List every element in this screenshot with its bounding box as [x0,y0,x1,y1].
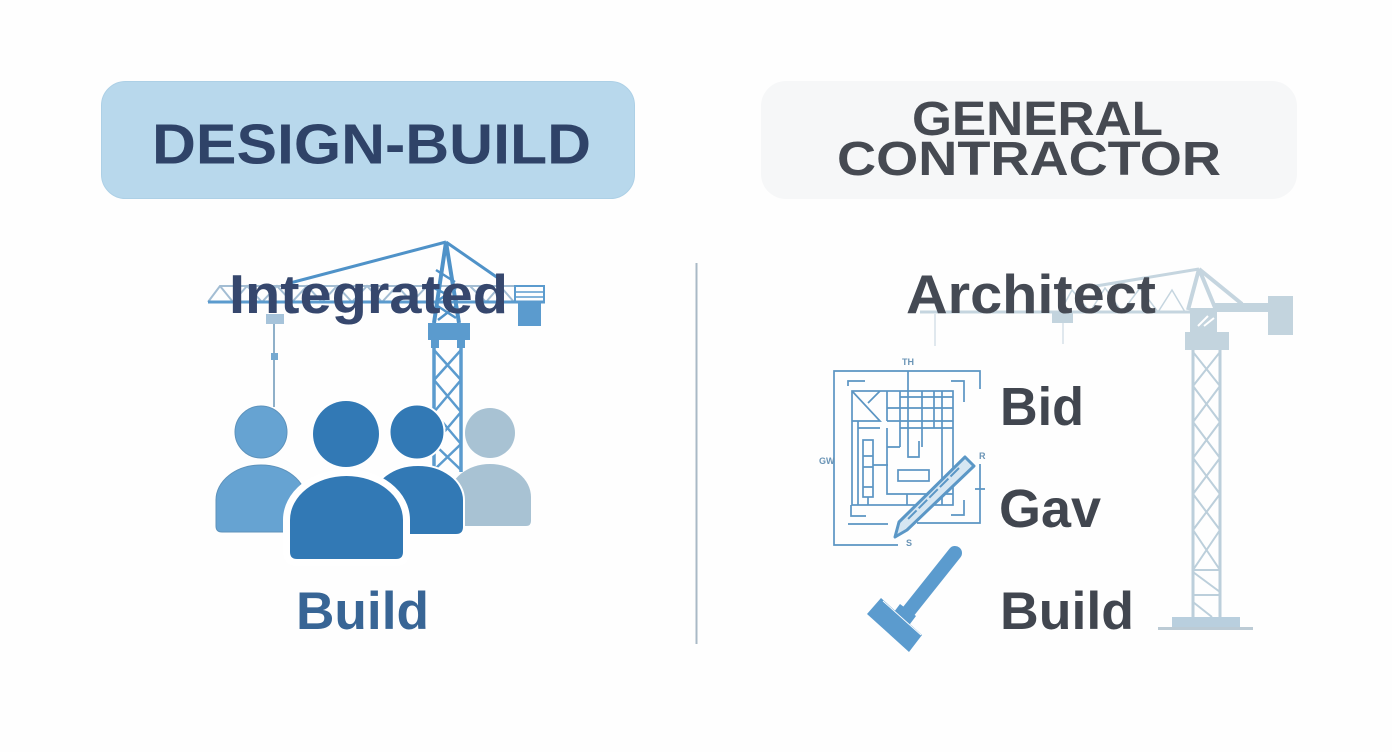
icon: blueprint floor plan: GW [819,456,835,466]
text: integrated: Integrated [229,263,508,325]
icon: blueprint floor plan: R [979,451,986,461]
heading pill: general contractor: CONTRACTOR [837,133,1221,186]
person: dark blue front centre [290,401,403,559]
person: light blue left [216,406,306,532]
icon: blueprint floor plan [819,357,986,548]
heading pill: design-build: DESIGN-BUILD [152,112,591,176]
text: gav: Gav [999,479,1101,539]
person: mid blue right [372,404,464,535]
divider [696,263,698,644]
heading pill: general contractor: GENERAL [912,93,1163,146]
heading pill: general contractor [761,81,1297,199]
text: architect: Architect [906,263,1156,325]
icon: pale tower crane [920,269,1293,630]
heading pill: design-build [102,82,634,198]
panel: design-build column [102,82,634,641]
icon: gavel hammer [867,553,955,652]
text: bid: Bid [1000,377,1084,437]
icon: blueprint floor plan: TH [902,357,914,367]
icon: pencil [895,457,974,537]
icon: blue tower crane [208,242,545,472]
person: pale back right [449,408,531,526]
icon: team of four people [216,401,531,559]
panel: general contractor column [761,81,1297,652]
text: build (general contractor): Build [1000,582,1134,641]
text: build (design-build): Build [296,582,429,641]
icon: blueprint floor plan: S [906,538,912,548]
